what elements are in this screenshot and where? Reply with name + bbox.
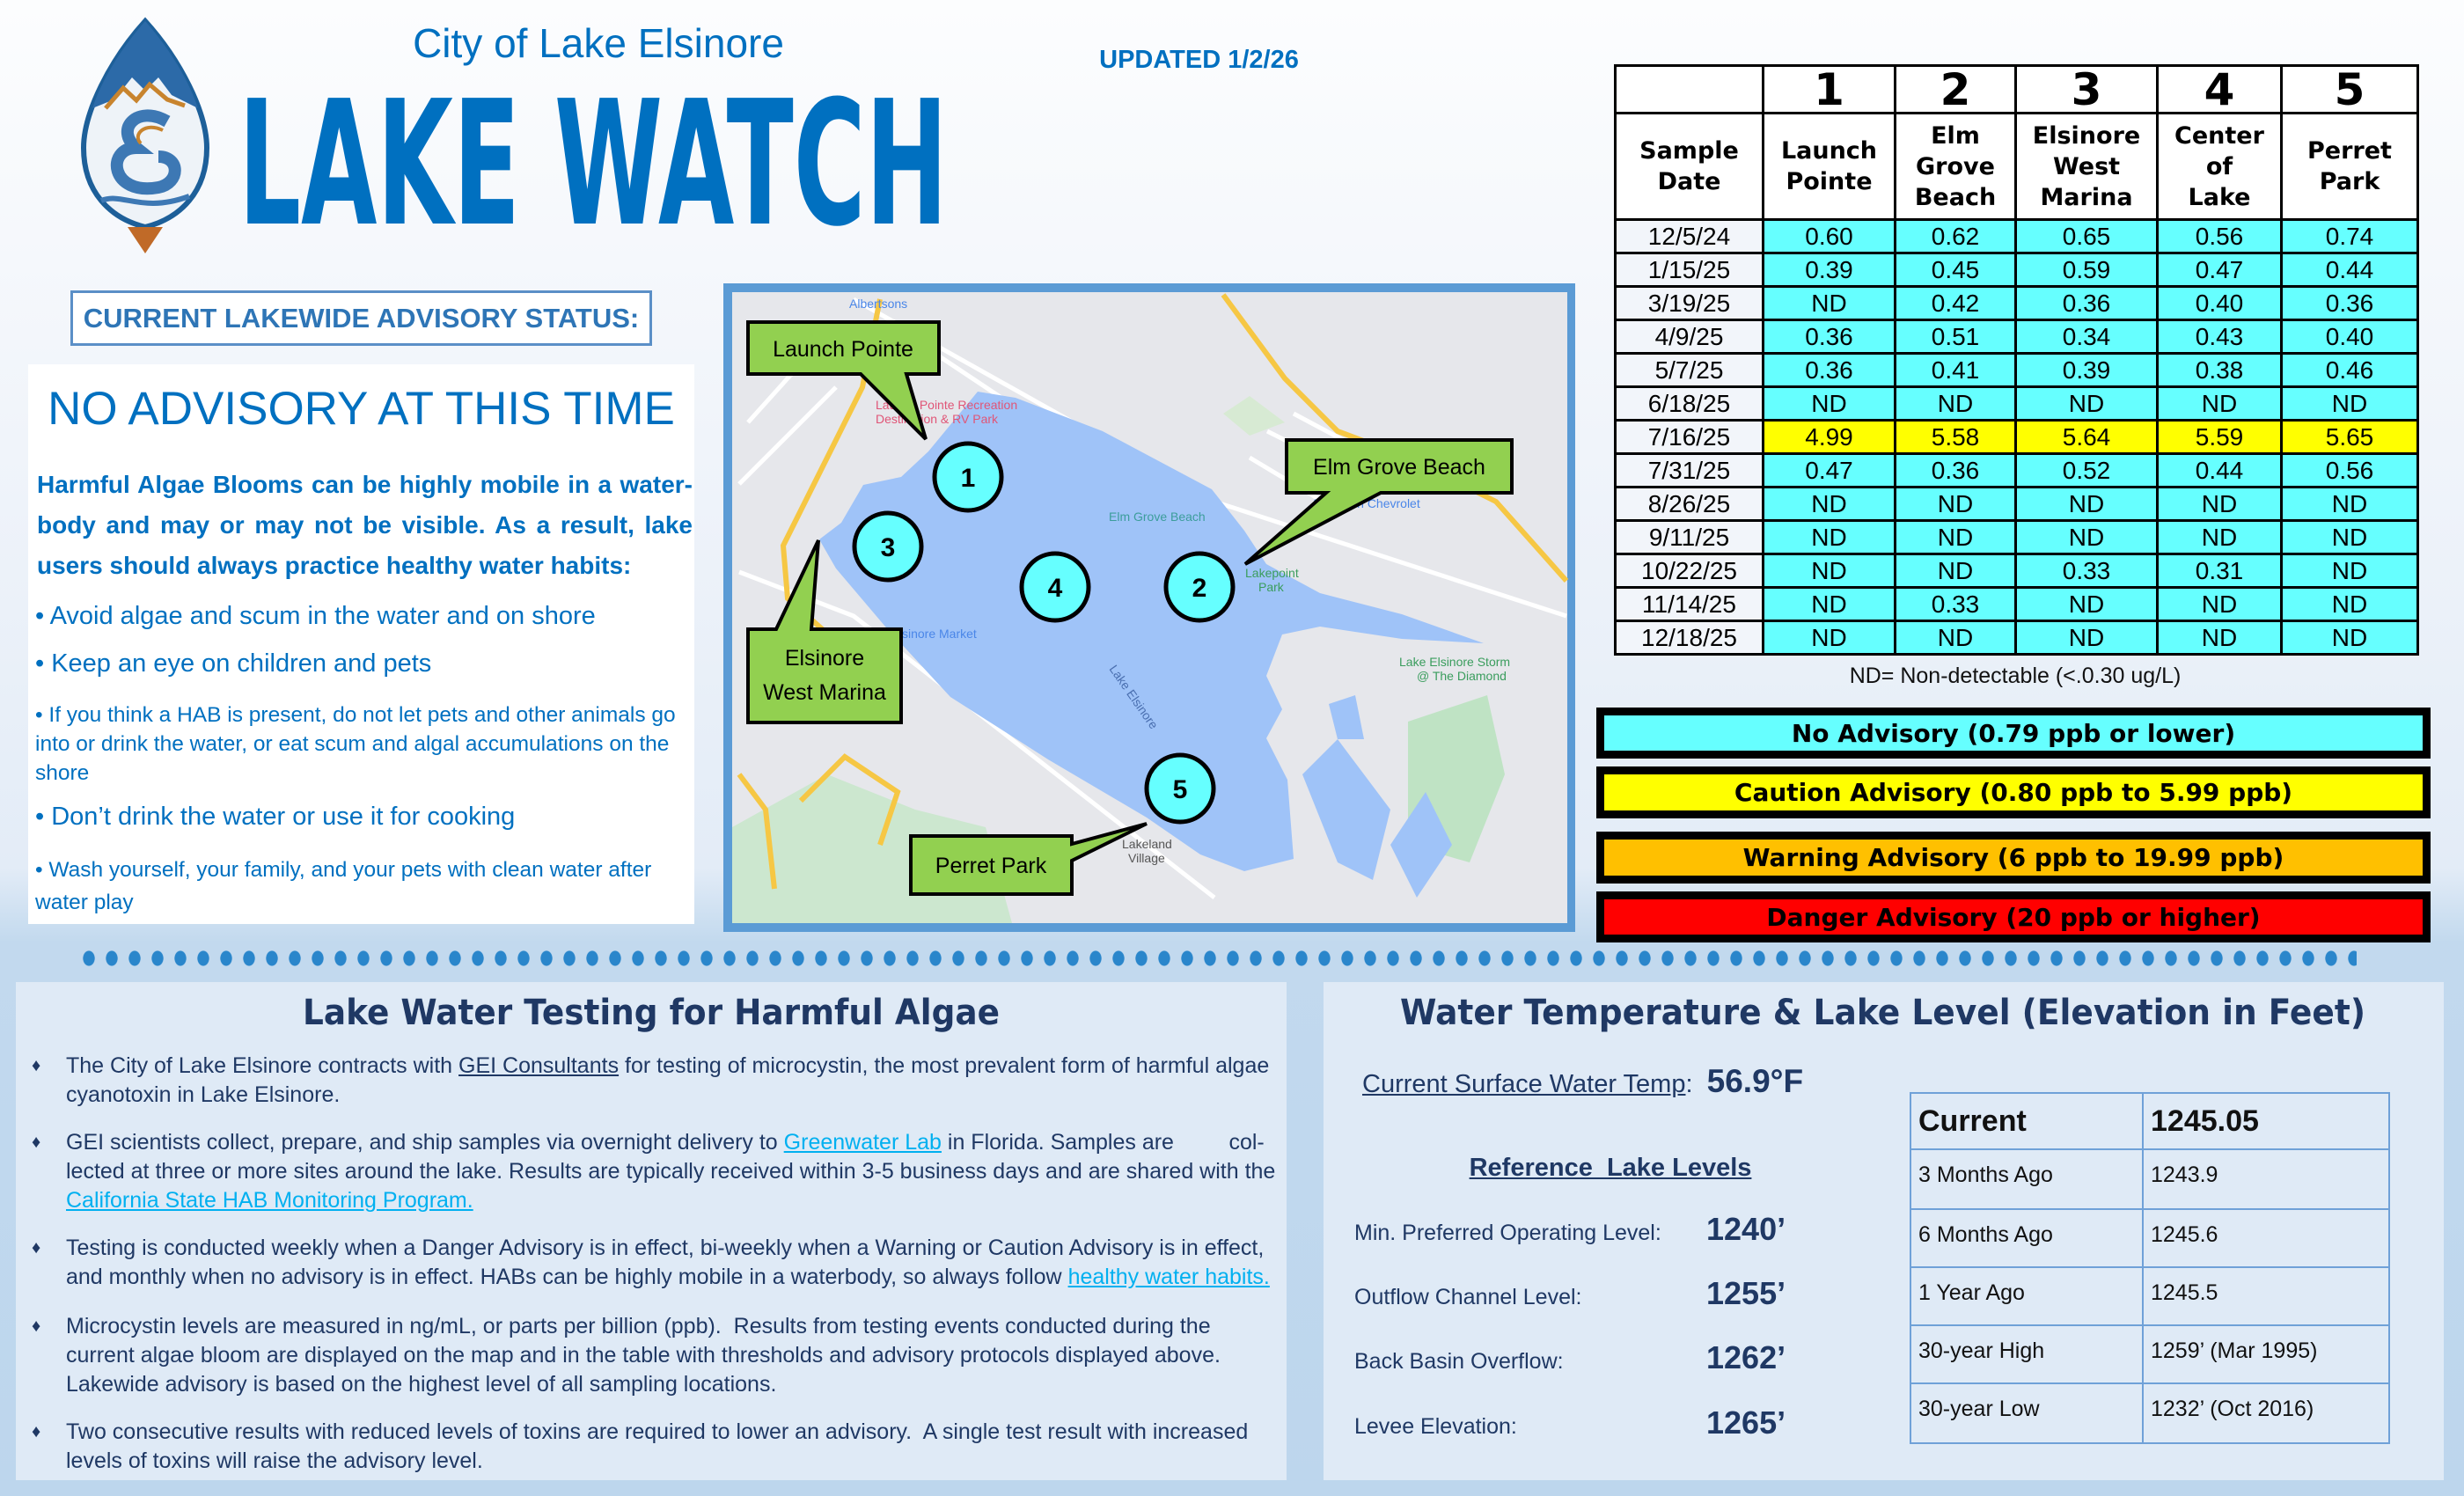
data table: 4.99 [1805,422,1853,451]
data table: 0.33 [1932,590,1979,618]
lake level table: 30-year Low [1918,1397,2040,1421]
map labels: Albertsons [849,297,907,311]
text: ♦ [32,1238,40,1258]
text: GEI scientists collect, prepare, and ship samples via overnight delivery to Greenwater Lab in Florida. Samples are col- [66,1130,1265,1155]
legend: caution [1596,766,2431,818]
reference levels list: Levee Elevation: [1354,1414,1517,1439]
data table: 5.65 [2326,422,2373,451]
reference levels list: Back Basin Overflow: [1354,1349,1564,1374]
data table: 5/7/25 [1655,356,1723,384]
lake level table: 1259’ (Mar 1995) [2151,1338,2317,1363]
green areas [732,774,1012,923]
text: Lakewide advisory is based on the highest level of all sampling locations. [66,1372,776,1397]
text: current algae bloom are displayed on the map and in the table with thresholds and advisory protocols displayed above. [66,1343,1221,1368]
data table: ND [2332,523,2367,551]
data table: 12/5/24 [1648,222,1730,250]
callout: Elsinore West Marina: Elsinore [785,646,864,671]
map labels: sinore Market [902,627,977,641]
callout: Elsinore West Marina [748,540,901,722]
callout: Launch Pointe [748,322,939,439]
site markers 1-5: 3 [881,533,895,562]
text block: intro: Harmful Algae Blooms can be highly mobile in a water-body and may or may not be visible. As a result, lake users should always practice healthy water habits: [37,471,693,579]
data table: 0.45 [1932,255,1979,283]
heading: no advisory: NO ADVISORY AT THIS TIME [48,383,675,435]
legend: danger [1596,891,2431,942]
data table: 0.62 [1932,222,1979,250]
callout: Elm Grove Beach: Elm Grove Beach [1313,455,1485,480]
data table: 0.46 [2326,356,2373,384]
data table: 5 [2335,63,2365,114]
reference lake levels heading: Reference Lake Levels [1470,1154,1751,1182]
data table: Grove [1916,153,1995,180]
reference levels list: 1265’ [1706,1404,1786,1441]
map labels: Lake Elsinore [1107,663,1161,731]
data table: ND [1811,623,1847,651]
data table: 1 [1814,63,1844,114]
data table: 0.52 [2063,456,2110,484]
callout: Elsinore West Marina: West Marina [763,680,886,705]
data table: 0.36 [1805,322,1853,350]
data table: 6/18/25 [1648,389,1730,417]
data table: 5.58 [1932,422,1979,451]
lake level table: 1245.6 [2151,1222,2218,1247]
table note: ND= Non-detectable (<.0.30 ug/L) [1850,664,2181,688]
advisory status label: CURRENT LAKEWIDE ADVISORY STATUS: [84,303,639,333]
text: lected at three or more sites around the lake. Results are typically received within 3-5 business days and are shared with the [66,1159,1275,1184]
data table: 0.41 [1932,356,1979,384]
data table: 0.38 [2196,356,2243,384]
map labels: Anderson Chevrolet [1311,496,1420,510]
reference levels list: Outflow Channel Level: [1354,1285,1581,1309]
lake level table: 1245.5 [2151,1280,2218,1305]
data table: 0.65 [2063,222,2110,250]
data table: West [2053,153,2120,180]
panel: water temperature & lake level [1324,982,2444,1480]
panel: advisory status [28,364,694,924]
data table: 0.74 [2326,222,2373,250]
panel: advisory status: • Avoid algae and scum in the water and on shore [35,602,596,630]
data table: ND [1811,289,1847,317]
data table: 0.59 [2063,255,2110,283]
data table: 10/22/25 [1641,556,1737,584]
legend: caution: Caution Advisory (0.80 ppb to 5.99 ppb) [1734,778,2292,807]
data table: 0.42 [1932,289,1979,317]
data table: ND [1938,389,1973,417]
city name: City of Lake Elsinore [413,20,784,66]
text: cyanotoxin in Lake Elsinore. [66,1082,340,1107]
data table: 0.36 [1805,356,1853,384]
lake level table: 30-year High [1918,1338,2044,1363]
logo [81,18,209,253]
lake level table: 1232’ (Oct 2016) [2151,1397,2314,1421]
current water temp: Current Surface Water Temp: 56.9°F [1362,1063,1803,1099]
data table: Center [2174,121,2264,150]
data table: ND [2069,489,2104,517]
site markers 1-5 [854,444,1233,822]
data table: ND [1938,523,1973,551]
panel: advisory status: • Wash yourself, your family, and your pets with clean water after water play [35,858,651,914]
map labels: Lakeland [1122,837,1172,851]
data table: Park [2320,168,2380,195]
data table: 0.56 [2196,222,2243,250]
data table: 3 [2072,63,2101,114]
data table: 12/18/25 [1641,623,1737,651]
data table: ND [2069,523,2104,551]
data table: 4 [2204,63,2234,114]
map labels: Destination & RV Park [876,412,999,426]
bullet: measurement [32,1314,1221,1397]
site markers 1-5: 1 [961,464,975,493]
lake level table: 1243.9 [2151,1162,2218,1187]
data table: ND [2332,623,2367,651]
callout: Elm Grove Beach [1245,440,1512,564]
data table [1614,63,2419,656]
callout: Perret Park [911,824,1147,894]
data table: of [2206,153,2233,180]
data table: 7/31/25 [1648,456,1730,484]
data table: 0.40 [2326,322,2373,350]
data table: ND [1938,556,1973,584]
text: California State HAB Monitoring Program. [66,1188,473,1213]
data table: 0.47 [2196,255,2243,283]
legend: danger: Danger Advisory (20 ppb or higher) [1766,903,2261,931]
data table: 11/14/25 [1642,590,1736,618]
lake [819,392,1484,871]
legend: warning: Warning Advisory (6 ppb to 19.99 ppb) [1743,843,2284,872]
text: ♦ [32,1422,40,1441]
reference levels list: 1262’ [1706,1339,1786,1375]
advisory status label [70,290,652,346]
data table: Marina [2040,183,2133,211]
data table: Perret [2307,137,2392,165]
data table: ND [1811,489,1847,517]
data table: ND [1938,489,1973,517]
bullet: sampling [32,1130,1275,1213]
map labels: Village [1128,851,1165,865]
text: ♦ [32,1316,40,1336]
map [723,283,1575,932]
site markers 1-5: 4 [1048,574,1063,603]
text: and monthly when no advisory is in effect. HABs can be highly mobile in a waterbody, so always follow healthy water habits. [66,1265,1270,1289]
text: Two consecutive results with reduced levels of toxins are required to lower an advisory. A single test result with increased [66,1419,1248,1444]
reference levels list [1354,1211,1786,1441]
text: ♦ [32,1133,40,1152]
data table: Elm [1931,121,1980,150]
data table: ND [2332,556,2367,584]
bullet: frequency [32,1236,1270,1289]
legend: no advisory: No Advisory (0.79 ppb or lower) [1792,718,2235,748]
data table: 0.40 [2196,289,2243,317]
data table: 7/16/25 [1648,422,1730,451]
data table: 0.44 [2196,456,2243,484]
bullet: consecutive results [32,1419,1248,1473]
data table: 0.36 [2063,289,2110,317]
data table: 8/26/25 [1648,489,1730,517]
panel: lake water testing [16,982,1287,1480]
reference levels list: 1255’ [1706,1275,1786,1311]
data table: Lake [2189,183,2250,211]
data table: ND [2202,623,2237,651]
data table: ND [2202,389,2237,417]
data table: 5.59 [2196,422,2243,451]
panel: advisory status: • If you think a HAB is present, do not let pets and other animals go into or drink the water, or eat scum and algal accumulations on the shore [35,703,676,785]
data table: 0.34 [2063,322,2110,350]
data table: ND [2069,590,2104,618]
reference levels list: Min. Preferred Operating Level: [1354,1221,1661,1245]
site markers 1-5: 5 [1173,775,1187,804]
data table: 9/11/25 [1649,523,1729,551]
data table: ND [2202,489,2237,517]
bullet list [35,602,676,914]
data table: Launch [1781,137,1877,165]
map labels: Lake Elsinore Storm [1399,655,1510,669]
map labels: @ The Diamond [1417,669,1507,683]
site markers 1-5: 2 [1192,574,1206,603]
bullet: GEI contract [32,1053,1269,1107]
data table: 0.39 [2063,356,2110,384]
data table: 5.64 [2063,422,2110,451]
data table: ND [2332,590,2367,618]
text: ♦ [32,1056,40,1075]
text: Microcystin levels are measured in ng/mL, or parts per billion (ppb). Results from testing events conducted during the [66,1314,1211,1338]
data table: 0.36 [2326,289,2373,317]
data table: 0.47 [1805,456,1853,484]
lake level table: 3 Months Ago [1918,1162,2053,1187]
data table: ND [1938,623,1973,651]
data table: ND [2069,623,2104,651]
lake level table [1910,1092,2390,1444]
data table: 4/9/25 [1655,322,1723,350]
lake level table: 1 Year Ago [1918,1280,2025,1305]
data table: ND [2202,523,2237,551]
data table: ND [2332,489,2367,517]
data table: 0.33 [2063,556,2110,584]
lake level table: 1245.05 [2151,1104,2259,1138]
text: Testing is conducted weekly when a Danger Advisory is in effect, bi-weekly when a Warning or Caution Advisory is in effect, [66,1236,1264,1260]
lake level table: Current [1918,1104,2027,1138]
data table: 0.36 [1932,456,1979,484]
data table: 0.56 [2326,456,2373,484]
data table: 2 [1940,63,1970,114]
reference levels list: 1240’ [1706,1211,1786,1247]
data table: Date [1658,168,1720,195]
highways [739,295,1566,889]
data table: ND [1811,389,1847,417]
data table: 0.51 [1932,322,1979,350]
updated date: UPDATED 1/2/26 [1099,46,1299,74]
data table: 0.31 [2196,556,2243,584]
data table: 0.39 [1805,255,1853,283]
map labels: Park [1258,580,1285,594]
callout: Launch Pointe: Launch Pointe [773,337,913,362]
text: The City of Lake Elsinore contracts with GEI Consultants for testing of microcystin, the most prevalent form of harmful algae [66,1053,1269,1078]
map labels: Elm Grove Beach [1109,510,1206,524]
data table: 3/19/25 [1648,289,1730,317]
data table: Pointe [1786,168,1873,195]
data table: 0.60 [1805,222,1853,250]
data table: 1/15/25 [1648,255,1730,283]
data table: ND [1811,556,1847,584]
data table: ND [2332,389,2367,417]
data table: ND [2202,590,2237,618]
callout: Perret Park: Perret Park [935,854,1047,878]
legend: warning [1596,832,2431,884]
data table: 0.44 [2326,255,2373,283]
data table: Beach [1915,183,1996,211]
text: levels of toxins will raise the advisory level. [66,1448,483,1473]
data table: Sample [1639,137,1739,165]
data table: 0.43 [2196,322,2243,350]
panel: advisory status: • Keep an eye on children and pets [35,649,431,678]
lake level table: 6 Months Ago [1918,1222,2053,1247]
data table: ND [2069,389,2104,417]
map labels: Launch Pointe Recreation [876,398,1017,412]
data table: Elsinore [2033,121,2140,150]
data table: ND [1811,590,1847,618]
panel: advisory status: • Don’t drink the water or use it for cooking [35,803,515,831]
data table: ND [1811,523,1847,551]
legend: no advisory [1596,708,2431,759]
streets [739,299,1566,898]
map labels [849,297,1510,865]
map labels: Lakepoint [1245,566,1299,580]
